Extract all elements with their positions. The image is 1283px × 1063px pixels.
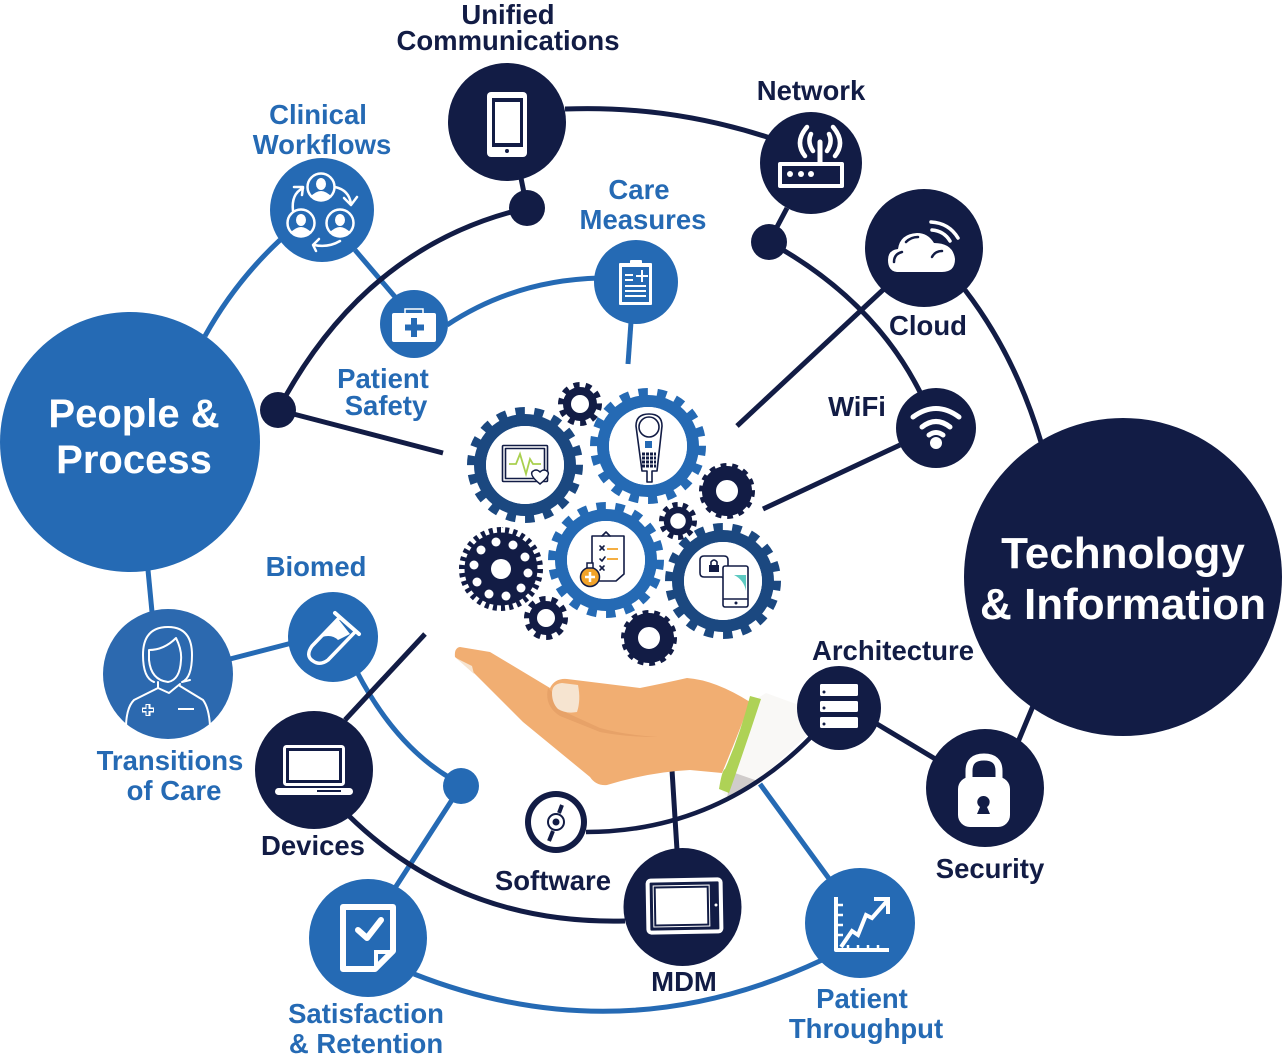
node: Satisfaction & Retention: & Retention: [289, 1028, 443, 1059]
node: Cloud: Cloud: [889, 310, 967, 341]
node: Clinical Workflows: Workflows: [253, 129, 391, 160]
node: Biomed: Biomed: [266, 551, 366, 582]
connector: software arc over cuff: [586, 736, 812, 832]
node: Patient Safety: Safety: [345, 390, 428, 421]
node: Care Measures: Care: [608, 174, 670, 205]
node: Architecture label: Architecture: [812, 635, 974, 666]
node: Transitions of Care: Transitions: [97, 745, 243, 776]
node: Patient Safety: [337, 290, 448, 421]
node: Biomed: [266, 551, 378, 682]
node: Cloud: [865, 189, 983, 341]
gear: secure messaging: [670, 528, 776, 634]
junction dot: biomed: [443, 768, 479, 804]
node: MDM: MDM: [651, 966, 717, 997]
node: MDM: [624, 848, 742, 997]
node: WiFi: WiFi: [828, 391, 886, 422]
hub: Technology & Information: Technology: [1001, 529, 1245, 578]
node: Software: [495, 791, 611, 896]
node: Devices: Devices: [261, 830, 365, 861]
node: Care Measures: [580, 174, 706, 324]
junction dot: network: [751, 224, 787, 260]
large dark gear with holes: [462, 530, 540, 608]
node: WiFi: [828, 388, 976, 468]
node: Security: Security: [936, 853, 1045, 884]
node: Care Measures: Measures: [580, 204, 706, 235]
node circle: Architecture: [797, 666, 881, 750]
gear: clipboard and flask: [553, 507, 659, 613]
connector lines: [148, 109, 1041, 1011]
hub: Technology & Information: [964, 418, 1282, 736]
node: Transitions of Care: of Care: [127, 775, 221, 806]
node: Patient Throughput: Throughput: [789, 1013, 943, 1044]
node: Software: Software: [495, 865, 611, 896]
node: Patient Safety: Patient: [337, 363, 429, 394]
node: Network: [757, 75, 866, 214]
node: Patient Throughput: Patient: [816, 983, 908, 1014]
small dark gears: [527, 385, 753, 664]
node: Satisfaction & Retention: [288, 879, 444, 1059]
node: Clinical Workflows: Clinical: [269, 99, 367, 130]
node: Unified Communications: Communications: [396, 25, 620, 56]
gear: patient monitor: [472, 412, 578, 518]
junction dot: people and process: [260, 392, 296, 428]
node: Devices: [255, 711, 373, 861]
junction dot: unified communications: [509, 190, 545, 226]
hub: People & Process: Process: [56, 438, 212, 482]
node: Transitions of Care: [97, 609, 243, 806]
node: Satisfaction & Retention: Satisfaction: [288, 998, 444, 1029]
hub: People & Process: [0, 312, 260, 572]
hand with cuff: [455, 647, 810, 798]
node: Network: Network: [757, 75, 866, 106]
hub: People & Process: People &: [48, 392, 220, 436]
gear: handheld device: [595, 393, 701, 499]
node: Patient Throughput: [789, 868, 943, 1044]
node: Security: [926, 729, 1045, 884]
hub: Technology & Information: & Information: [980, 580, 1266, 629]
node: Unified Communications: [396, 0, 620, 181]
node: Clinical Workflows: [253, 99, 391, 262]
